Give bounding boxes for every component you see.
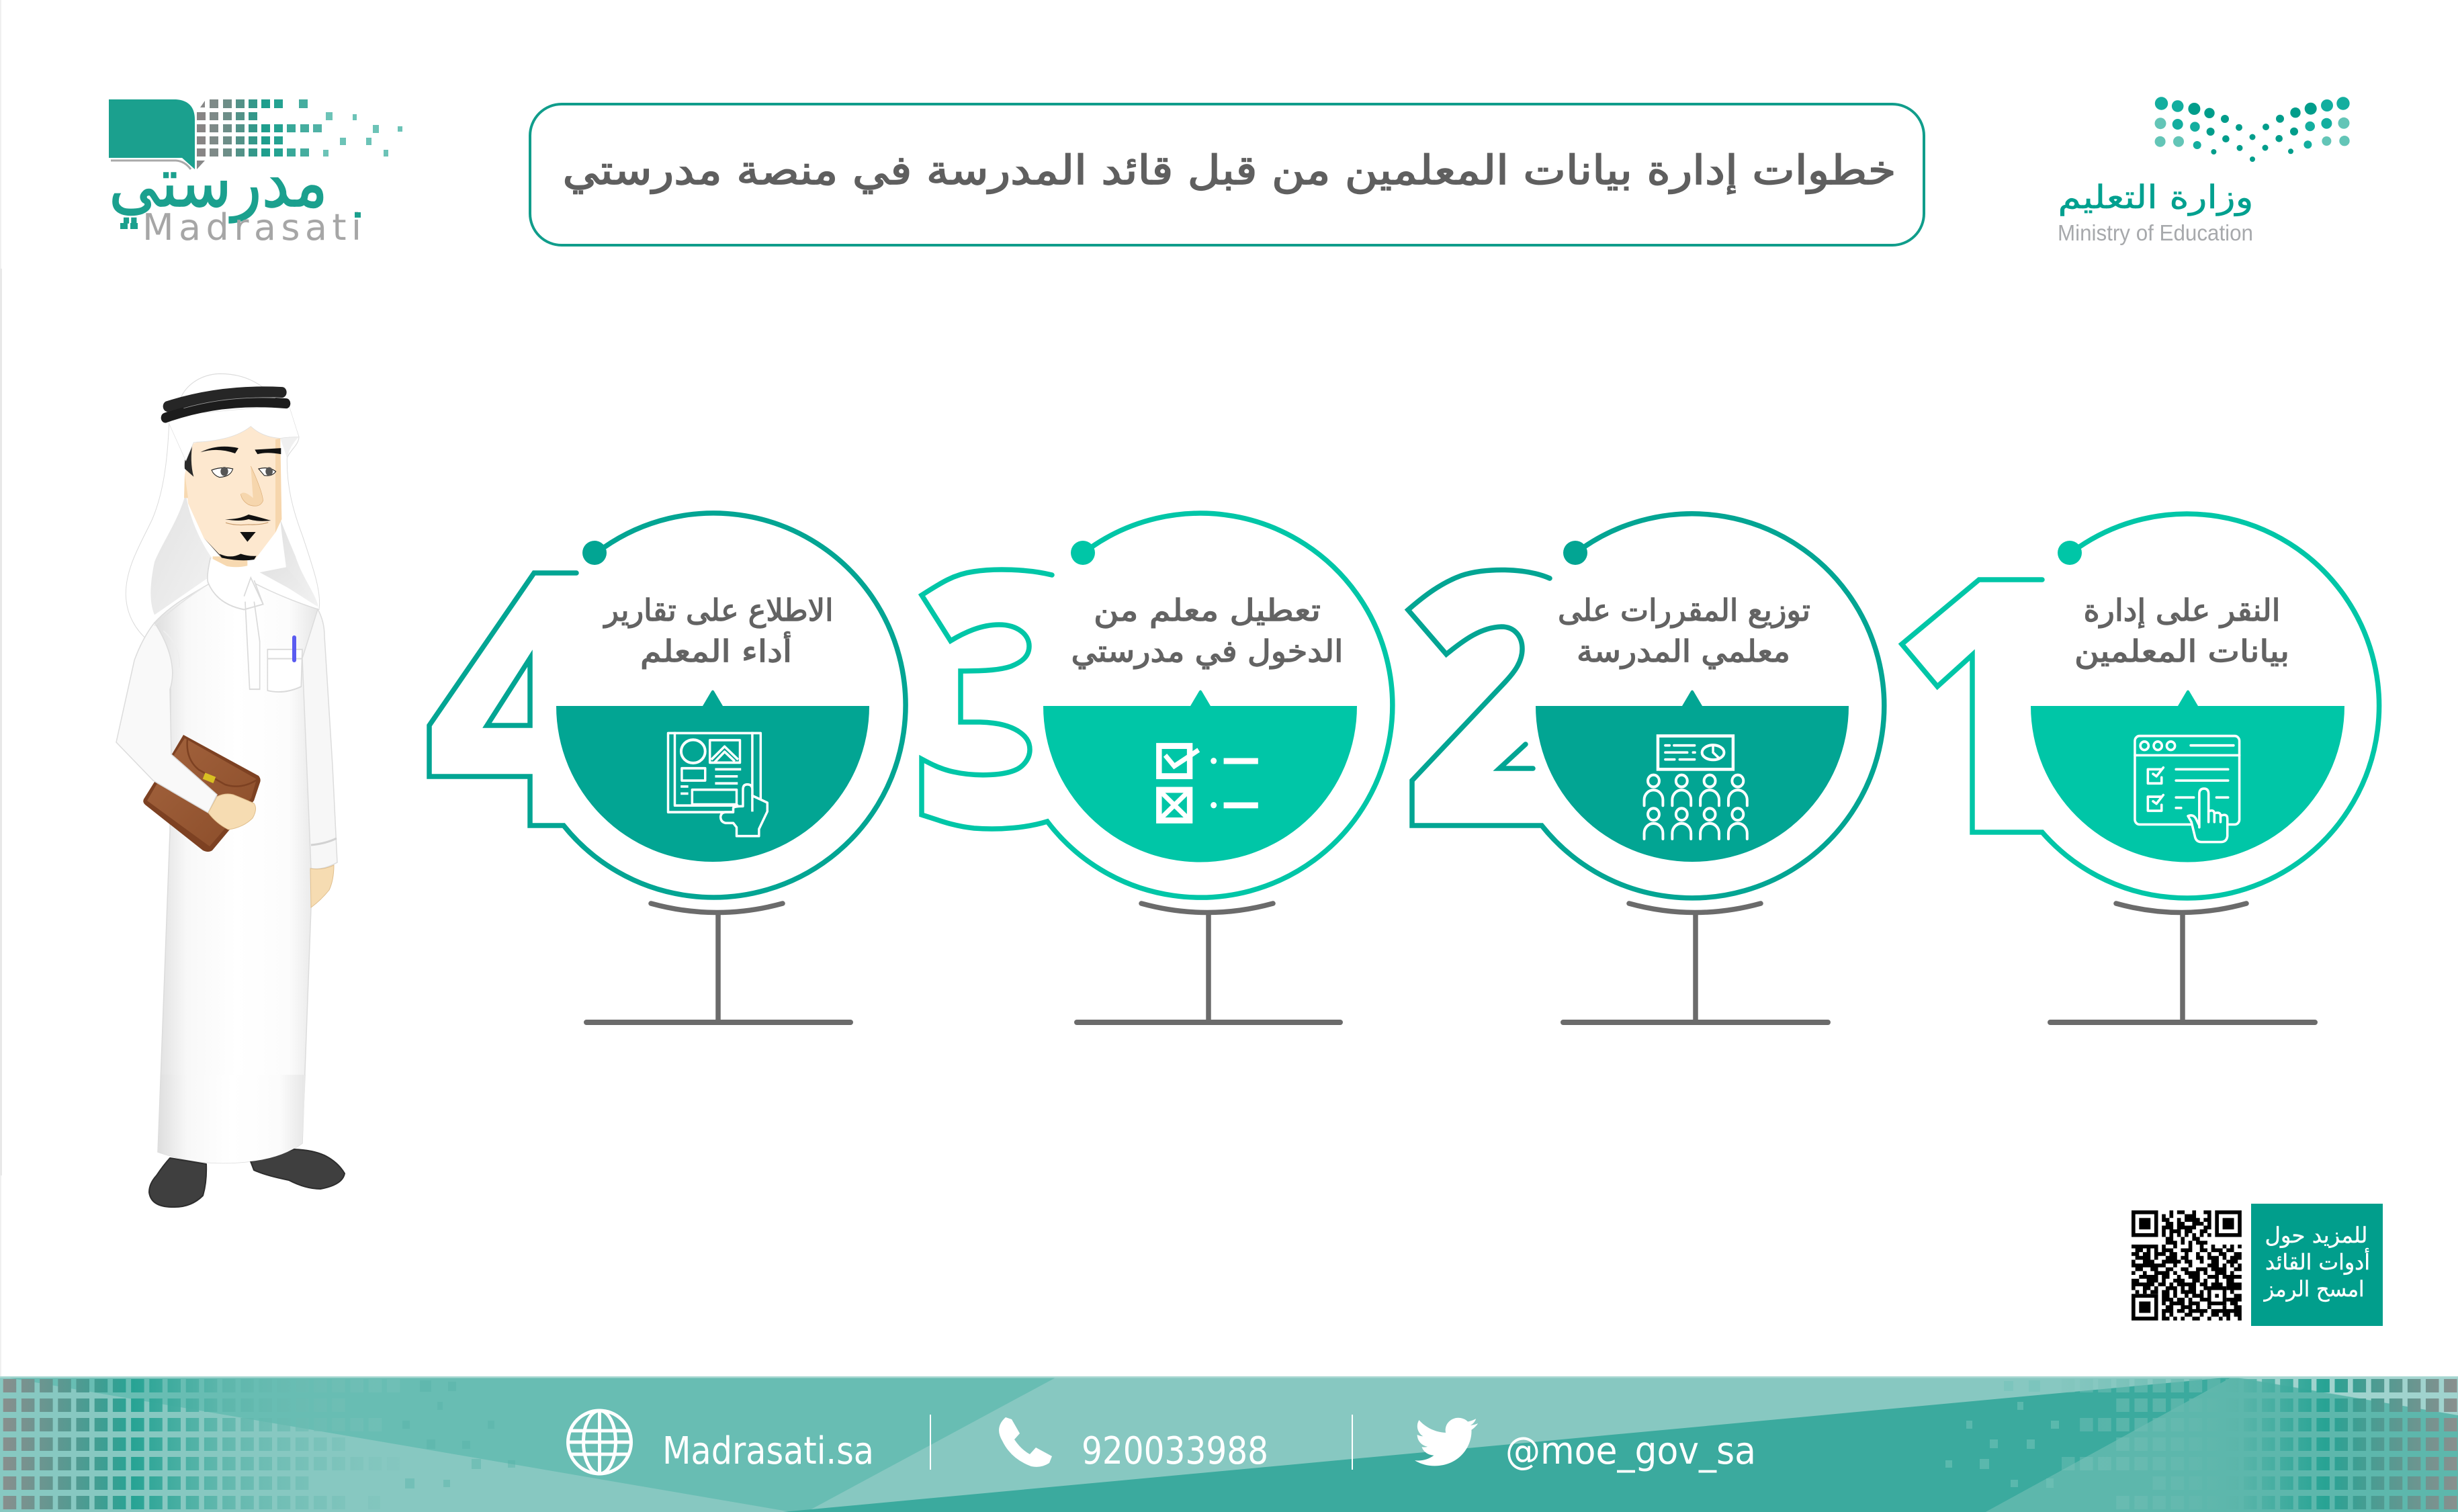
face <box>184 427 281 567</box>
QR caption box <box>2251 1204 2383 1326</box>
number 3 with ring <box>922 513 1393 897</box>
pixel pattern right <box>2062 1386 2458 1503</box>
pen <box>292 635 296 662</box>
right shoe <box>251 1149 345 1189</box>
number 2 with ring <box>1408 514 1884 898</box>
briefcase <box>143 735 261 852</box>
icon: window checklist with hand <box>2135 736 2240 842</box>
logo text: Arabic ministry name: وزارة التعليم <box>2058 179 2253 216</box>
icon: dots emblem <box>2155 97 2350 162</box>
step text: أداء المعلم <box>640 631 792 669</box>
website: Madrasati.sa <box>662 1429 874 1473</box>
ring dot <box>1563 541 1587 565</box>
pixel pattern left <box>3 1386 400 1503</box>
step text: الدخول في مدرستي <box>1071 633 1344 669</box>
step text: تعطيل معلم من <box>1094 592 1321 628</box>
logo: Ministry of Education <box>2058 97 2350 245</box>
step text: توزيع المقررات على <box>1558 592 1810 628</box>
QR caption text: امسح الرمز <box>2263 1276 2365 1302</box>
step text <box>1558 592 1810 669</box>
logo text: Madrasati: Madrasati <box>142 206 361 249</box>
icon: open book <box>109 99 402 169</box>
half disc <box>1043 691 1357 862</box>
QR caption text <box>2263 1222 2370 1302</box>
logo accents <box>120 212 361 229</box>
right hand <box>310 865 334 907</box>
right arm <box>302 609 337 869</box>
step text <box>603 592 833 669</box>
stand <box>586 903 850 1022</box>
step 2 <box>1408 514 1884 1022</box>
character: teacher <box>116 373 345 1207</box>
step 4 <box>429 513 906 1022</box>
number 1 with ring <box>1902 514 2379 898</box>
step 1 <box>1902 514 2379 1022</box>
icon: check and cross list <box>1156 743 1258 824</box>
step text: بيانات المعلمين <box>2074 633 2289 669</box>
headdress front and band <box>165 392 299 461</box>
step text <box>2074 592 2289 669</box>
ring dot <box>1071 541 1095 565</box>
title: خطوات إدارة بيانات المعلمين من قبل قائد المدرسة في منصة مدرستي <box>563 147 1896 194</box>
QR code <box>2132 1210 2242 1321</box>
phone number: 920033988 <box>1082 1429 1268 1473</box>
stand <box>1077 903 1340 1022</box>
half disc <box>556 691 869 862</box>
divider <box>1352 1415 1353 1470</box>
icon: bird <box>1415 1418 1478 1466</box>
logo text: English ministry name: Ministry of Education <box>2058 220 2253 245</box>
icon: report page with hand <box>668 733 767 836</box>
robe body <box>155 571 318 1163</box>
left arm <box>116 623 217 813</box>
logo: Madrasati <box>109 99 402 249</box>
divider <box>930 1415 931 1470</box>
footer band <box>0 1376 2458 1512</box>
left hand <box>208 794 256 830</box>
icon: globe <box>568 1411 631 1474</box>
step text <box>1071 592 1344 669</box>
QR caption text: للمزيد حول <box>2265 1222 2367 1248</box>
step text: معلمي المدرسة <box>1577 633 1790 669</box>
QR caption text: أدوات القائد <box>2265 1248 2370 1275</box>
headdress back <box>126 373 320 640</box>
ring dot <box>582 541 607 565</box>
stand <box>1563 903 1828 1022</box>
step 3 <box>922 513 1393 1022</box>
logo text: Arabic name: مدرستي <box>109 143 328 223</box>
number 2 inner stroke <box>1499 744 1533 768</box>
step text: النقر على إدارة <box>2084 592 2280 628</box>
robe lower overlap <box>158 1075 306 1163</box>
half disc <box>2031 691 2344 862</box>
title box <box>530 104 1924 245</box>
stand <box>2050 903 2315 1022</box>
step text: الاطلاع على تقارير <box>603 592 833 628</box>
number 4 inner counter <box>487 658 530 725</box>
icon: teachers at board <box>1644 736 1747 839</box>
social handle: @moe_gov_sa <box>1505 1429 1756 1473</box>
number 4 with ring <box>429 513 906 897</box>
half disc <box>1536 691 1849 862</box>
ring dot <box>2058 541 2082 565</box>
left shoe <box>149 1158 206 1207</box>
collar and pocket <box>155 558 302 692</box>
icon: phone <box>999 1417 1052 1467</box>
